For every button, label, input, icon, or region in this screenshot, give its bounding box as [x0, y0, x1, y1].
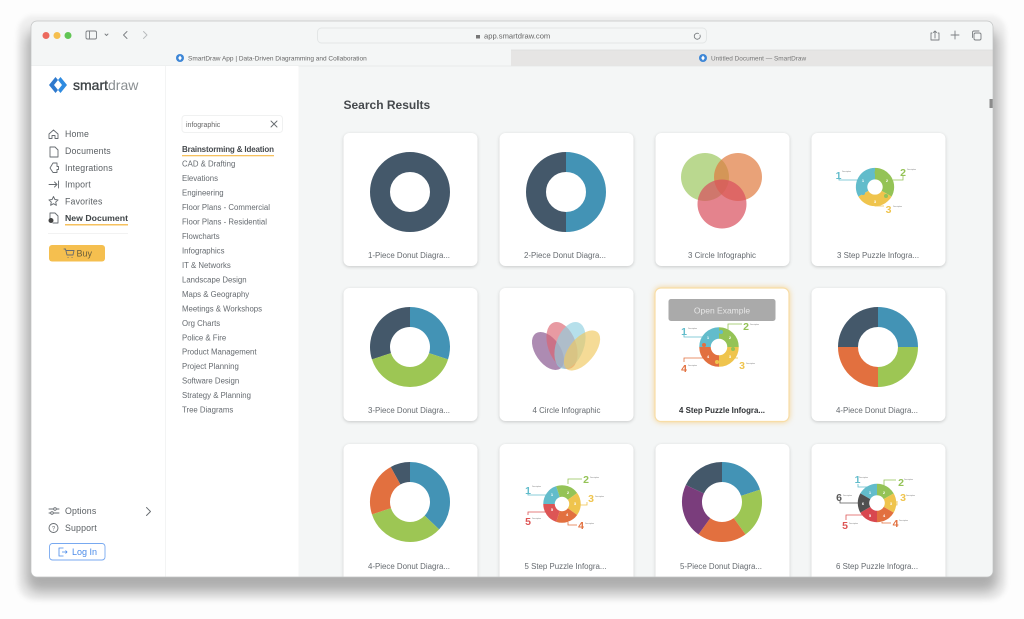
card: 3 step puzzle: Description [907, 168, 916, 171]
category list: Meetings & Workshops [182, 304, 262, 314]
card: 4 step puzzle (selected): 4 [681, 363, 687, 375]
card: 3 step puzzle: Description [842, 170, 851, 173]
log in button [50, 544, 105, 560]
category list: Elevations [182, 174, 218, 183]
category list: Product Management [182, 348, 257, 356]
category list: Tree Diagrams [182, 406, 233, 414]
card: 6 step puzzle: Description [859, 476, 868, 479]
card: 6 step puzzle: Description [906, 494, 915, 497]
card: 6 step puzzle: 1 [855, 474, 861, 486]
card: 5 step puzzle: 2 [583, 474, 589, 486]
card: 4 step puzzle (selected): Description [688, 327, 697, 330]
card: 3 step puzzle: 3 [886, 204, 892, 216]
card: 5 step puzzle: 1 [525, 485, 531, 497]
category list: Maps & Geography [182, 290, 249, 299]
card: 5-piece donut: 5-Piece Donut Diagra... [680, 562, 762, 571]
card: 3 step puzzle: 1 [862, 178, 865, 183]
card: 4 step puzzle (selected): 1 [707, 335, 710, 340]
category list: Landscape Design [182, 276, 247, 284]
card: 5 step puzzle: 5 [551, 507, 554, 512]
card: 4 circle infographic: 4 Circle Infographic [533, 406, 601, 415]
card: 3 step puzzle: 2 [900, 167, 906, 179]
card: 3-piece donut: 3-Piece Donut Diagra... [368, 406, 450, 415]
card: 2-piece donut: 2-Piece Donut Diagra... [524, 251, 606, 260]
card: 5 step puzzle: 4 [566, 512, 569, 517]
category list [182, 145, 274, 414]
buy button [49, 245, 105, 262]
category list: Brainstorming & Ideation [182, 145, 274, 154]
category list: Flowcharts [182, 232, 220, 241]
category list: Police & Fire [182, 334, 226, 342]
search box [182, 116, 282, 132]
nav: integrations: Integrations [65, 163, 113, 173]
card: 5 step puzzle [500, 444, 634, 584]
nav: home [49, 129, 89, 139]
tab: untitled document: Untitled Document — SmartDraw [711, 55, 807, 62]
card: 4-piece donut [812, 288, 946, 421]
card: 4-piece donut variant [344, 444, 478, 584]
card: 4 step puzzle (selected): 4 Step Puzzle Infogra... [679, 406, 765, 415]
tab bar [31, 50, 993, 66]
card: 5 step puzzle: 2 [567, 490, 570, 495]
category panel [166, 66, 298, 577]
card: 5 step puzzle: 3 [588, 493, 594, 505]
nav: support [49, 523, 97, 533]
category list: Engineering [182, 188, 224, 198]
card: 5 step puzzle: 5 Step Puzzle Infogra... [524, 562, 607, 571]
card: 4 step puzzle (selected): 1 [681, 326, 687, 338]
card: 4 step puzzle (selected): Description [750, 323, 759, 326]
card: 6 step puzzle: 5 [842, 520, 848, 532]
logo: smartdraw [73, 77, 139, 93]
heading: search results: Search Results [344, 98, 431, 112]
card: 3 step puzzle: 2 [886, 178, 889, 183]
card: 6 step puzzle: 3 [890, 501, 893, 506]
left sidebar [31, 66, 166, 577]
card: 6 step puzzle: Description [904, 478, 913, 481]
category list: Project Planning [182, 362, 239, 371]
card: 3 circle infographic [656, 133, 790, 266]
scrollbar handle [990, 99, 993, 108]
card: 5 step puzzle: Description [590, 476, 599, 479]
card: 6 step puzzle: 6 [836, 492, 842, 504]
open example button: Open Example [694, 306, 750, 316]
nav: import: Import [65, 180, 91, 190]
card: 3 step puzzle: 1 [836, 170, 842, 182]
category list: Software Design [182, 376, 239, 386]
card: 6 step puzzle: 6 [862, 501, 865, 506]
buy button: Buy [76, 248, 93, 258]
card: 5-piece donut [656, 444, 790, 584]
card: 3-piece donut [344, 288, 478, 421]
card: 6 step puzzle: Description [849, 522, 858, 525]
card: 4 step puzzle (selected): 2 [743, 321, 749, 333]
card: 6 step puzzle: 4 [883, 513, 886, 518]
card: 3 step puzzle: 3 Step Puzzle Infogra... [837, 251, 919, 260]
card: 6 step puzzle: 2 [883, 490, 886, 495]
card: 5 step puzzle: Description [532, 485, 541, 488]
card: 3 step puzzle: 3 [874, 199, 877, 204]
card: 6 step puzzle: 3 [900, 492, 906, 504]
nav: favorites: Favorites [65, 196, 103, 206]
card: 4-piece donut variant: 4-Piece Donut Diagra... [368, 562, 450, 571]
nav: favorites [49, 196, 103, 206]
card: 6 step puzzle: 2 [898, 477, 904, 489]
nav: new document: New Document [65, 213, 128, 223]
card: 3 step puzzle: Description [893, 205, 902, 208]
browser toolbar [42, 28, 982, 44]
category list: Floor Plans - Residential [182, 218, 267, 226]
card: 5 step puzzle: Description [585, 522, 594, 525]
card: 4 step puzzle (selected) [655, 288, 789, 422]
log in button: Log In [72, 547, 97, 557]
tab: smartdraw app: SmartDraw App | Data-Driven Diagramming and Collaboration [188, 55, 367, 62]
card: 4 step puzzle (selected): 2 [729, 335, 732, 340]
address bar [318, 28, 706, 43]
nav: new document [48, 213, 128, 226]
card: 3 circle infographic: 3 Circle Infographic [688, 251, 756, 260]
nav: documents: Documents [65, 146, 111, 156]
card: 1-piece donut: 1-Piece Donut Diagra... [368, 251, 450, 260]
card: 6 step puzzle: 4 [893, 518, 899, 530]
toolbar actions [931, 31, 981, 40]
card: 4 circle infographic [500, 288, 634, 421]
card: 6 step puzzle: Description [899, 519, 908, 522]
card: 5 step puzzle: 4 [578, 520, 584, 532]
card: 4-piece donut: 4-Piece Donut Diagra... [836, 406, 918, 415]
card: 6 step puzzle: 6 Step Puzzle Infogra... [836, 562, 918, 571]
category list: Org Charts [182, 319, 220, 328]
search box: infographic [186, 122, 221, 129]
nav: options [49, 506, 150, 516]
address bar: app.smartdraw.com [484, 31, 550, 40]
card: 4 step puzzle (selected): 3 [739, 360, 745, 372]
card: 6 step puzzle [812, 444, 946, 584]
nav: documents [50, 146, 111, 157]
card: 4 step puzzle (selected): 4 [707, 354, 710, 359]
card: 5 step puzzle: 1 [551, 492, 554, 497]
card: 2-piece donut [500, 133, 634, 266]
nav: home: Home [65, 129, 89, 139]
nav: support: ? [52, 526, 56, 532]
nav: support: Support [65, 523, 97, 533]
card: 4 step puzzle (selected): 3 [729, 354, 732, 359]
card: 3 step puzzle [812, 133, 946, 266]
category list: Floor Plans - Commercial [182, 203, 270, 212]
card: 5 step puzzle: 3 [574, 501, 577, 506]
category list: Strategy & Planning [182, 391, 251, 400]
card: 5 step puzzle: 5 [525, 516, 531, 528]
category list: CAD & Drafting [182, 160, 235, 168]
category list: Infographics [182, 246, 225, 256]
card: 6 step puzzle: Description [843, 494, 852, 497]
card: 4 step puzzle (selected): Description [688, 364, 697, 367]
card: 5 step puzzle: Description [595, 495, 604, 498]
card: 6 step puzzle: 1 [869, 490, 872, 495]
nav: import [49, 180, 91, 190]
category list: IT & Networks [182, 261, 231, 270]
nav: options: Options [65, 506, 97, 516]
card: 6 step puzzle: 5 [869, 513, 872, 518]
card: 1-piece donut [344, 133, 478, 266]
card: 5 step puzzle: Description [532, 517, 541, 520]
card: 4 step puzzle (selected): Description [746, 362, 755, 365]
